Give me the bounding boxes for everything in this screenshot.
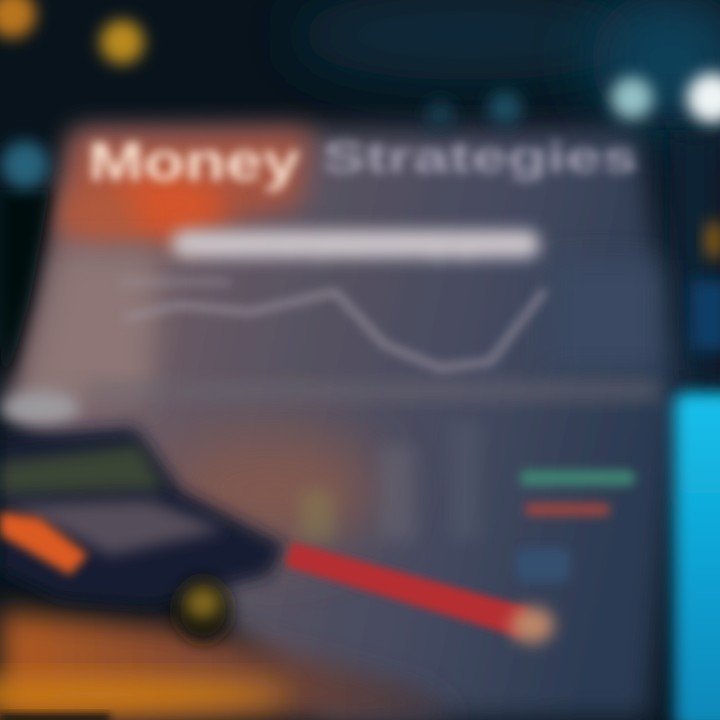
subtitle: Financial planning guide <box>172 228 540 261</box>
legend <box>515 470 635 582</box>
panel: tilted financial sheet <box>0 130 680 720</box>
right accent: amber glow <box>705 220 720 260</box>
line chart <box>120 278 545 368</box>
floor: orange desk <box>0 610 460 720</box>
pencil <box>285 542 554 643</box>
bokeh lights <box>0 0 720 189</box>
title <box>88 132 638 192</box>
cyan side panel <box>674 392 720 720</box>
left dark edge <box>0 190 50 375</box>
title: Money <box>88 132 300 192</box>
title: Strategies <box>322 133 638 182</box>
calculator <box>0 428 285 642</box>
bar chart <box>300 420 480 540</box>
